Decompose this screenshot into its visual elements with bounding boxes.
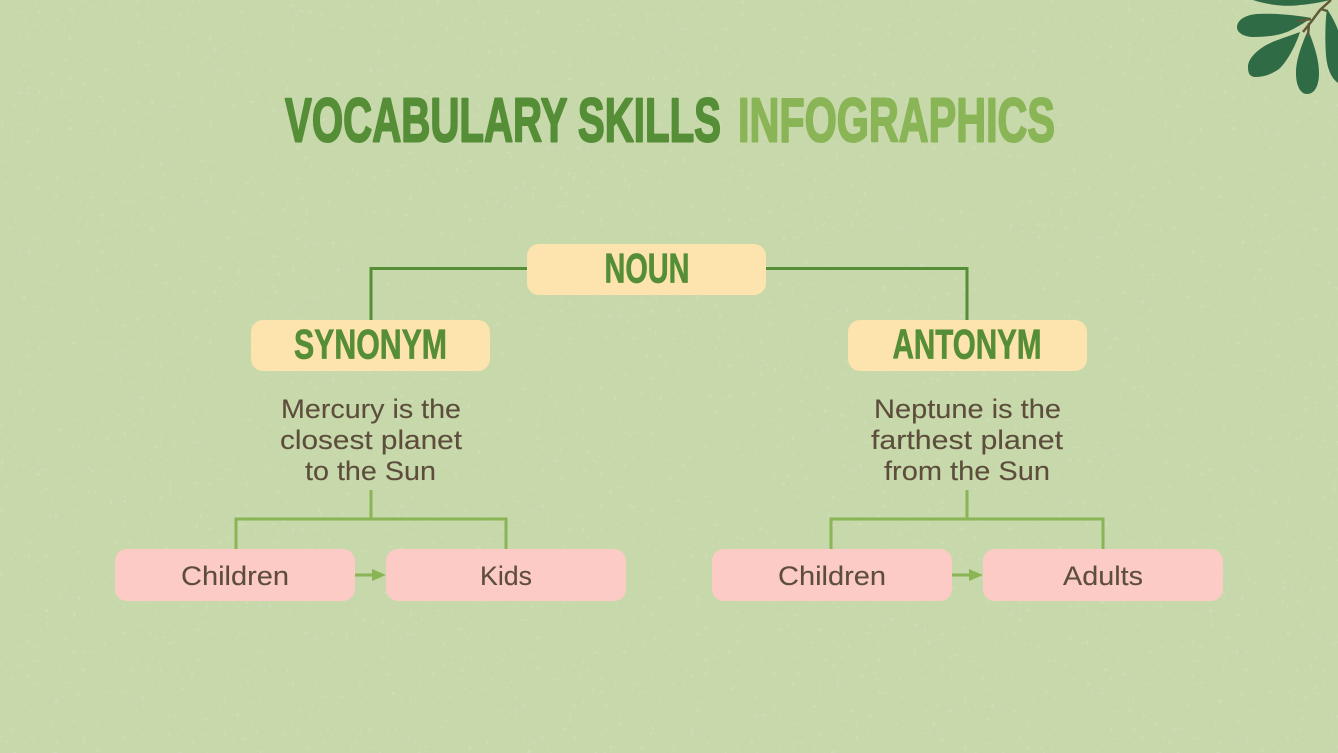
- box: adults: Adults: [1063, 561, 1143, 591]
- box: children (antonym): Children: [778, 561, 886, 591]
- box: children (synonym): [115, 549, 355, 601]
- box: children (synonym): Children: [181, 561, 289, 591]
- box: synonym: SYNONYM: [294, 320, 447, 368]
- box: children (antonym): [712, 549, 952, 601]
- text: synonym description: Mercury is the: [281, 394, 461, 424]
- text: antonym description: from the Sun: [884, 456, 1050, 486]
- connector: synonym bracket: [236, 490, 506, 549]
- title: INFOGRAPHICS: [738, 86, 1055, 156]
- box: kids: Kids: [480, 561, 532, 591]
- text: synonym description: closest planet: [280, 425, 463, 455]
- box: adults: [983, 549, 1223, 601]
- text: synonym description: [280, 394, 463, 486]
- box: noun: [527, 244, 766, 295]
- text: antonym description: farthest planet: [871, 425, 1064, 455]
- connector: noun to antonym: [766, 268, 967, 320]
- text: antonym description: [871, 394, 1064, 486]
- connector: antonym bracket: [831, 490, 1103, 549]
- box: kids: [386, 549, 626, 601]
- title: VOCABULARY SKILLS: [285, 86, 721, 156]
- text: antonym description: Neptune is the: [874, 394, 1061, 424]
- connector: noun to synonym: [371, 268, 527, 320]
- text: synonym description: to the Sun: [305, 456, 436, 486]
- arrow: children to adults: [952, 569, 983, 581]
- arrow: children to kids: [355, 569, 386, 581]
- box: noun: NOUN: [604, 244, 690, 292]
- icon: leaf branch: [1237, 0, 1338, 94]
- box: antonym: ANTONYM: [892, 320, 1042, 368]
